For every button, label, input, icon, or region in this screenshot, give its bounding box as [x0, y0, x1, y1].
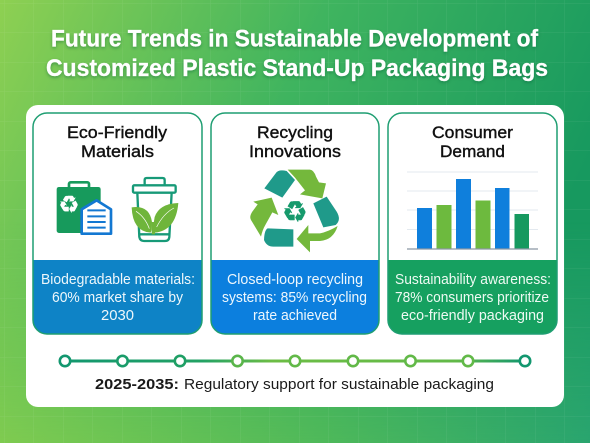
- callout: sustainability awareness: eco-friendly packaging: [401, 307, 544, 324]
- title: Customized Plastic Stand-Up Packaging Bags: [46, 55, 548, 82]
- heading: consumer demand: Demand: [440, 143, 505, 161]
- callout: closed-loop recycling: rate achieved: [253, 307, 337, 324]
- callout: closed-loop recycling: Closed-loop recycling: [227, 271, 363, 288]
- heading: eco-friendly materials: Eco-Friendly: [67, 124, 168, 142]
- callout: sustainability awareness: Sustainability awareness:: [395, 271, 551, 288]
- panel: eco-friendly materials: [33, 113, 202, 334]
- icon: bin with leaves: [132, 178, 178, 241]
- title: [46, 26, 548, 82]
- bar chart: [407, 172, 538, 249]
- callout: closed-loop recycling: [211, 260, 379, 334]
- icon: recycling bag and document box: [57, 182, 111, 234]
- panel: recycling innovations: [211, 113, 379, 334]
- heading: recycling innovations: Innovations: [249, 143, 341, 161]
- heading: recycling innovations: [249, 124, 341, 161]
- timeline: [60, 356, 530, 366]
- timeline caption: 2025-2035:: [95, 376, 179, 393]
- callout: biodegradable materials: [33, 260, 202, 334]
- timeline caption: Regulatory support for sustainable packaging: [184, 376, 494, 393]
- callout: sustainability awareness: 78% consumers prioritize: [395, 289, 549, 306]
- title: Future Trends in Sustainable Development of: [51, 26, 539, 52]
- icon: recycling bag and document box: ♻: [59, 190, 79, 218]
- panel: consumer demand: [388, 113, 557, 334]
- heading: consumer demand: [432, 124, 514, 161]
- icon: recycling arrows: [250, 170, 339, 252]
- callout: biodegradable materials: 60% market share by: [52, 289, 183, 306]
- heading: recycling innovations: Recycling: [257, 124, 333, 142]
- callout: closed-loop recycling: systems: 85% recycling: [222, 289, 367, 306]
- icon: recycling arrows: ♻: [282, 196, 308, 229]
- callout: sustainability awareness: [388, 260, 557, 334]
- heading: eco-friendly materials: Materials: [81, 143, 154, 161]
- heading: eco-friendly materials: [67, 124, 168, 161]
- callout: biodegradable materials: Biodegradable materials:: [41, 271, 195, 288]
- panel: main white container: [26, 105, 564, 407]
- heading: consumer demand: Consumer: [432, 124, 514, 142]
- callout: biodegradable materials: 2030: [101, 307, 134, 324]
